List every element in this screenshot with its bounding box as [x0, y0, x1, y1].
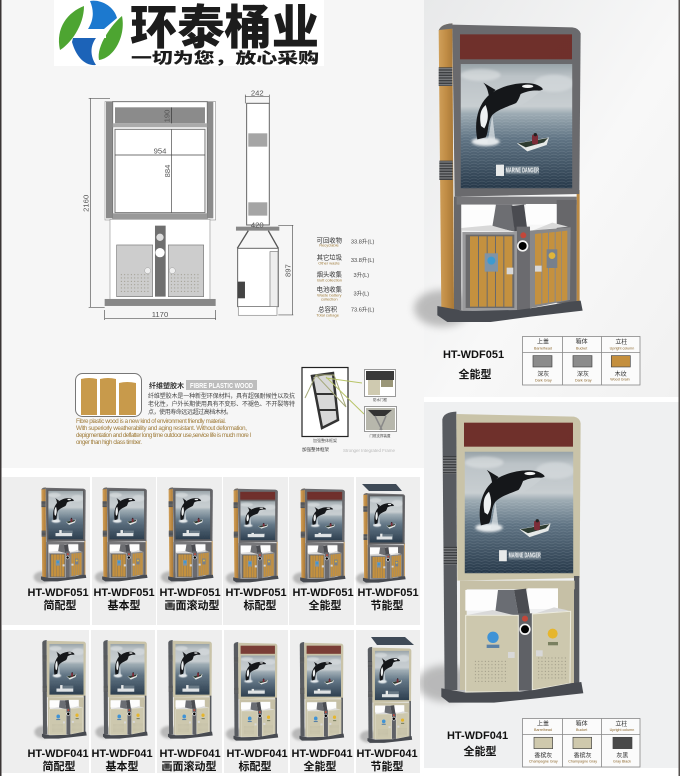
frame illustration	[302, 368, 364, 436]
card: 标配型: HT-WDF051	[225, 587, 287, 599]
dimension: 884	[163, 129, 172, 213]
card: 简配型: 简配型	[44, 598, 76, 612]
dimension: 897: 897	[283, 264, 292, 277]
badge: FIBRE PLASTIC WOOD	[190, 383, 253, 390]
label: 全能型: 全能型	[464, 744, 496, 758]
card: 画面滚动型: HT-WDF051	[159, 587, 221, 599]
colour table: HT-WDF051: Barrelhead	[534, 346, 552, 350]
dimension: 1170	[105, 310, 216, 320]
colour table: HT-WDF041	[522, 718, 640, 767]
frame title: Stronger Integrated Frame	[343, 448, 395, 453]
colour table: HT-WDF041: 箱体	[576, 720, 588, 728]
capacity specification list: 33.8升(L)	[351, 238, 375, 246]
row: HT-WDF041 variants	[2, 630, 420, 773]
colour table: HT-WDF041: Champagne Gray	[529, 760, 558, 764]
English description: onger than high class timber.	[76, 439, 142, 446]
card: 全能型: HT-WDF041	[291, 748, 353, 760]
colour table: HT-WDF041: 香槟灰	[534, 752, 552, 760]
dimension: 954	[115, 146, 205, 155]
card: 全能型: HT-WDF051	[292, 587, 354, 599]
capacity specification list: 总容积	[318, 304, 338, 313]
card: 基本型: 基本型	[108, 598, 140, 612]
colour table: HT-WDF051: 立柱	[615, 338, 627, 346]
English description	[76, 418, 251, 446]
capacity specification list: Other waste	[318, 260, 340, 265]
card: 简配型: 简配型	[42, 759, 76, 773]
card: 基本型	[91, 630, 155, 773]
colour table: HT-WDF051: Upright column	[610, 346, 634, 350]
detail: reinforced door edge	[364, 370, 396, 396]
icon: leaf and H mark	[59, 1, 123, 65]
dimension: 897	[278, 225, 293, 315]
label: HT-WDF041: HT-WDF041	[447, 730, 508, 742]
capacity specification list: 电池收集	[317, 285, 343, 294]
card: 简配型: HT-WDF051	[27, 587, 89, 599]
colour table: HT-WDF041: Upright column	[610, 728, 634, 732]
colour table: HT-WDF051: Dark Gray	[575, 378, 592, 382]
colour table: HT-WDF051	[522, 336, 640, 385]
left edge strip	[0, 0, 2, 776]
card: 全能型	[290, 630, 354, 773]
card: 基本型: HT-WDF051	[93, 587, 155, 599]
card: 标配型: HT-WDF041	[226, 748, 288, 760]
right edge strip	[678, 0, 680, 776]
card: 画面滚动型	[157, 477, 222, 625]
card: 节能型: 节能型	[370, 759, 404, 773]
card: 画面滚动型: 画面滚动型	[164, 598, 220, 612]
colour table: HT-WDF051: 深灰	[537, 370, 549, 378]
technical drawing: side view	[236, 88, 293, 315]
capacity specification list: 可回收物	[317, 235, 343, 244]
frame title	[302, 446, 395, 453]
card: 标配型	[223, 477, 288, 625]
dimension: 420: 420	[251, 221, 264, 230]
colour table: HT-WDF041: Bucket	[576, 728, 587, 732]
card: 基本型	[92, 477, 156, 625]
card: 基本型: 基本型	[106, 759, 138, 773]
dimension: 242: 242	[251, 88, 264, 97]
card: 画面滚动型: HT-WDF041	[159, 748, 221, 760]
English description: Fibre plastic wood is a new kind of environment friendly material.	[76, 418, 226, 425]
English description: depigmentation and deflatter long time outdoor use,service life is much more l	[76, 432, 251, 439]
Chinese description: 点，使用寿命远远超过高档木材。	[148, 408, 232, 416]
card: 标配型: 标配型	[244, 598, 276, 612]
card: 简配型	[2, 630, 89, 773]
card: 全能型: 全能型	[308, 598, 342, 612]
panel: fibre plastic wood	[76, 374, 295, 446]
logo name: 环泰桶业	[130, 1, 319, 54]
colour table: HT-WDF051: 上盖	[537, 338, 549, 346]
product: HT-WDF041	[417, 412, 583, 703]
card: 节能型	[356, 630, 420, 773]
logo slogan: 一切为您，放心采购	[131, 49, 319, 67]
capacity specification list: 3升(L)	[353, 290, 369, 298]
capacity specification list: Butt collection	[317, 278, 342, 283]
capacity specification list	[316, 235, 375, 317]
colour table: HT-WDF051: 箱体	[576, 338, 588, 346]
panel: strengthened integrated frame	[302, 368, 396, 453]
card: 节能型: 节能型	[370, 598, 404, 612]
Chinese description: 老化性，户外长期使用具有不变形、不褪色、不开裂等特	[148, 400, 295, 408]
card: 画面滚动型: 画面滚动型	[162, 759, 216, 773]
detail caption: 门框支撑装置	[370, 433, 391, 438]
card: 标配型	[224, 630, 288, 773]
dimension: 2160	[82, 98, 110, 307]
colour table: HT-WDF041: 灰黑	[616, 752, 628, 760]
card: 基本型: HT-WDF041	[91, 748, 153, 760]
colour table: HT-WDF041: 上盖	[537, 720, 549, 728]
colour table: HT-WDF051: Bucket	[576, 346, 587, 350]
frame title: 加强整体框架	[302, 446, 329, 453]
dimension: 242	[245, 88, 269, 103]
dimension: 884: 884	[163, 164, 172, 177]
card: 节能型: HT-WDF051	[357, 587, 419, 599]
card: 简配型: HT-WDF041	[27, 748, 89, 760]
label: HT-WDF051: HT-WDF051	[443, 349, 504, 361]
colour table: HT-WDF051: Wood Grain	[610, 378, 630, 382]
colour table: HT-WDF041: Gray Black	[613, 760, 631, 764]
capacity specification list: Total cubage	[316, 312, 340, 317]
label: 全能型: 全能型	[458, 367, 492, 381]
dimension: 1170: 1170	[152, 310, 168, 319]
card: 简配型	[2, 477, 90, 625]
colour table: HT-WDF051: 木纹	[615, 370, 627, 378]
card: 节能型	[356, 477, 420, 625]
Chinese description: 纤维塑胶木是一种新型环保材料，具有超强耐候性以及抗	[148, 392, 295, 400]
capacity specification list: 其它垃圾	[317, 252, 343, 261]
technical drawing: front view	[82, 98, 216, 320]
product: HT-WDF051	[414, 23, 583, 327]
capacity specification list: collection	[321, 297, 338, 302]
capacity specification list: 3升(L)	[353, 271, 369, 279]
English description: With superiorly weatherability and aging resistant. Without deformation,	[76, 425, 247, 432]
capacity specification list: 73.6升(L)	[351, 306, 375, 314]
capacity specification list: 烟头收集	[317, 269, 343, 278]
heading: 纤维塑胶木	[149, 381, 184, 390]
capacity specification list: Recyclable	[319, 243, 339, 248]
Chinese description	[148, 392, 295, 416]
frame caption: 加强整体框架	[313, 437, 337, 443]
colour table: HT-WDF041: Champagne Gray	[568, 760, 597, 764]
badge	[186, 380, 257, 390]
dimension: 954: 954	[154, 146, 167, 155]
panel: HT-WDF051 large view	[424, 0, 678, 397]
card: 标配型: 标配型	[238, 759, 272, 773]
colour table: HT-WDF041: 香槟灰	[574, 752, 592, 760]
colour table: HT-WDF051: 深灰	[577, 370, 589, 378]
colour table: HT-WDF041: Barrelhead	[534, 728, 552, 732]
capacity specification list: 33.8升(L)	[351, 256, 375, 264]
dimension: 2160: 2160	[82, 195, 91, 212]
card: 全能型	[289, 477, 354, 625]
colour table: HT-WDF041: 立柱	[615, 720, 627, 728]
card: 节能型: HT-WDF041	[356, 748, 418, 760]
card: 画面滚动型	[157, 630, 222, 773]
logo: 环泰桶业	[54, 0, 324, 67]
detail caption: 防水门框	[373, 397, 387, 402]
card: 全能型: 全能型	[304, 759, 336, 773]
panel: HT-WDF041 large view	[424, 402, 678, 768]
row: HT-WDF051 variants	[2, 477, 420, 625]
colour table: HT-WDF051: Dark Gray	[535, 378, 552, 382]
product: HT-WDF051: MARINE DANGER	[506, 166, 539, 175]
detail: door support bar	[364, 406, 396, 432]
product: HT-WDF041: MARINE DANGER	[509, 550, 541, 559]
wood samples	[76, 374, 142, 416]
panel: upper-left product information area	[0, 0, 424, 468]
capacity specification list: Waste battery	[317, 293, 342, 298]
dimension: 190: 190	[163, 110, 172, 122]
